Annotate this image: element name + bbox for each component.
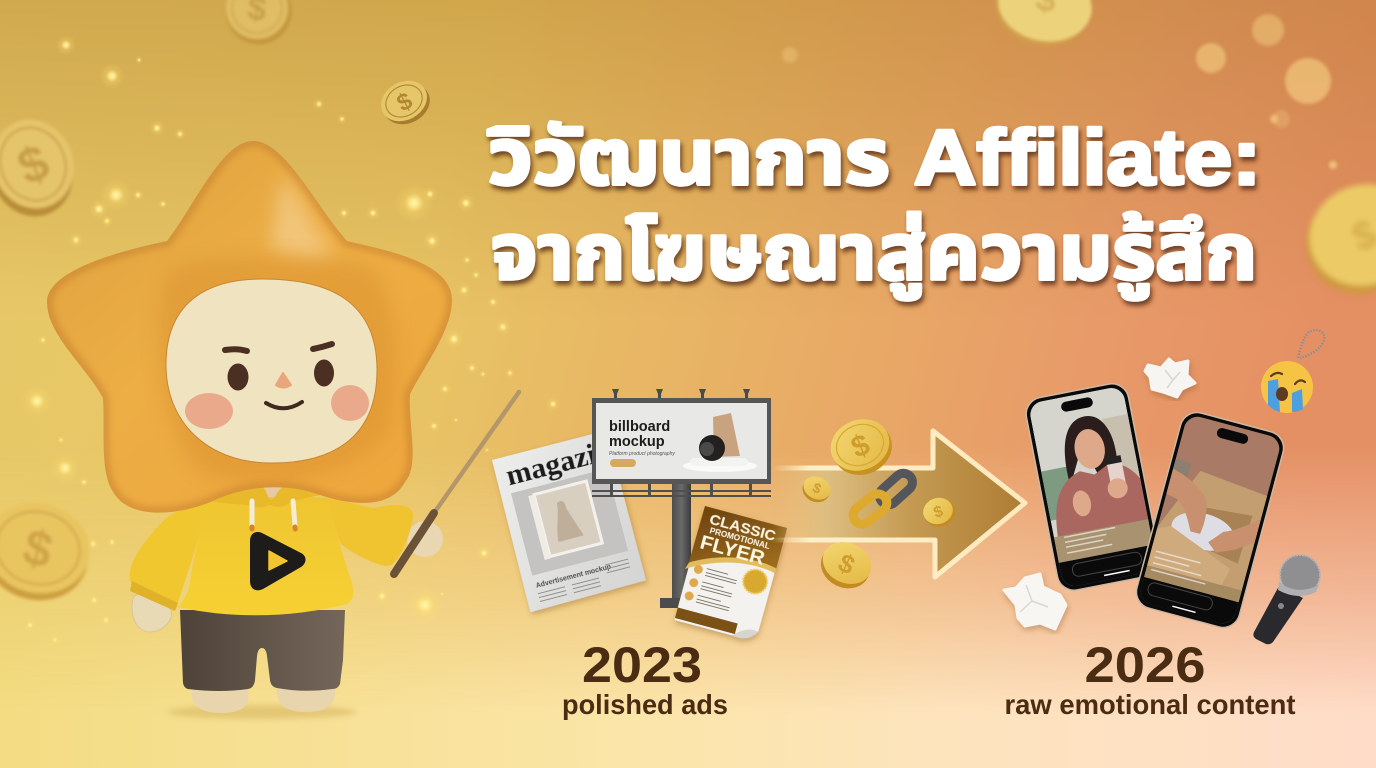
mic grille xyxy=(1280,555,1320,595)
star shading xyxy=(47,141,452,513)
flyer gold band xyxy=(685,544,777,592)
coin lower left: $ xyxy=(17,518,58,580)
chain link icon xyxy=(849,470,916,528)
ground shadow xyxy=(167,705,357,719)
caption polished ads: polished ads xyxy=(562,689,728,720)
title: จากโฆษณาสู่ความรู้สึก xyxy=(491,208,1257,300)
play icon xyxy=(250,532,306,590)
mascot character xyxy=(47,141,519,719)
label 2023: 2023 xyxy=(582,637,702,693)
nose xyxy=(276,373,291,388)
keychain chain xyxy=(1298,330,1324,358)
mouth xyxy=(266,402,302,408)
coin on arrow lower xyxy=(814,534,878,596)
magazine cover photo xyxy=(511,469,628,576)
billboard xyxy=(592,389,771,608)
mic switch xyxy=(1278,603,1284,609)
billboard subtext: Platform product photography xyxy=(609,451,675,457)
face xyxy=(166,279,377,463)
flyer heading: FLYER xyxy=(698,532,767,570)
coin top center xyxy=(221,0,296,49)
shoes xyxy=(191,686,335,713)
emoji eyes xyxy=(1271,373,1305,384)
flyer seal xyxy=(740,567,770,596)
coin on arrow large xyxy=(823,410,900,484)
billboard base xyxy=(660,598,680,608)
billboard heading xyxy=(609,419,670,450)
small sharp coin: $ xyxy=(392,87,418,117)
flyer footer xyxy=(675,607,738,634)
mic handle xyxy=(1253,586,1303,644)
shorts xyxy=(180,610,345,691)
sparkle particles xyxy=(21,35,560,645)
drawstrings xyxy=(252,501,295,529)
coin on arrow large: $ xyxy=(847,428,875,465)
title: วิวัฒนาการ Affiliate: xyxy=(488,113,1261,201)
emoji tears xyxy=(1268,379,1303,412)
billboard panel xyxy=(596,403,767,479)
star head xyxy=(47,141,452,513)
billboard heading: billboard xyxy=(609,419,670,435)
label 2026 xyxy=(1004,637,1296,720)
billboard frame xyxy=(592,398,771,484)
eyebrows xyxy=(225,344,332,351)
flyer heading: CLASSIC xyxy=(708,511,778,545)
hoodie body xyxy=(178,497,353,615)
phone left notch xyxy=(1060,397,1094,413)
flyer heading xyxy=(698,510,778,571)
phone right xyxy=(1133,409,1287,631)
magazine title: magazine xyxy=(502,430,628,492)
billboard lights xyxy=(612,389,750,398)
flyer heading: PROMOTIONAL xyxy=(709,526,771,551)
arrow xyxy=(772,431,1025,577)
title xyxy=(488,113,1261,300)
background coins xyxy=(0,0,1376,611)
phone right video xyxy=(1137,414,1282,627)
hood collar xyxy=(210,485,326,508)
flyer list xyxy=(684,563,704,602)
tissue top xyxy=(1145,359,1195,397)
magazine caption: Advertisement mockup xyxy=(535,564,612,590)
left sleeve xyxy=(130,503,205,605)
phone left xyxy=(1025,383,1154,591)
coin top left: $ xyxy=(10,134,57,196)
emoji face xyxy=(1261,361,1313,413)
coin top right xyxy=(990,0,1098,54)
label 2026: 2026 xyxy=(1084,637,1206,693)
emoji mouth xyxy=(1276,387,1288,401)
billboard product xyxy=(683,413,757,472)
coin on arrow small right xyxy=(920,493,959,531)
microphone xyxy=(1253,555,1320,644)
bokeh circles top right xyxy=(782,14,1337,169)
left cuff xyxy=(130,581,178,611)
coin on arrow small left: $ xyxy=(810,479,824,497)
coin on arrow lower: $ xyxy=(834,547,860,581)
crying emoji keychain xyxy=(1261,330,1324,413)
cheeks xyxy=(185,385,369,429)
mic band xyxy=(1278,582,1319,596)
right hand xyxy=(407,521,443,557)
pointer stick xyxy=(394,392,519,574)
billboard button xyxy=(610,459,636,467)
coin lower left xyxy=(0,492,99,611)
billboard heading: mockup xyxy=(609,434,665,450)
small sharp coin xyxy=(374,72,437,133)
neck xyxy=(258,485,282,497)
phone right notch xyxy=(1216,427,1249,445)
billboard walkway xyxy=(592,484,771,497)
flyer header xyxy=(689,506,787,585)
billboard post xyxy=(672,484,691,606)
magazine xyxy=(491,427,659,612)
left hand xyxy=(132,594,171,632)
phone left video xyxy=(1030,388,1151,586)
flyer xyxy=(671,505,787,643)
right sleeve xyxy=(322,497,413,566)
tissue bottom xyxy=(1004,574,1066,629)
coin top left xyxy=(0,107,90,229)
coin on arrow small left xyxy=(798,472,834,507)
caption raw emotional content: raw emotional content xyxy=(1004,689,1296,720)
magazine body lines xyxy=(535,559,633,601)
coin right edge xyxy=(1291,169,1376,309)
label 2023 xyxy=(562,637,728,720)
coin on arrow small right: $ xyxy=(932,503,945,522)
flyer page curl xyxy=(732,625,758,642)
eyes xyxy=(228,360,334,390)
